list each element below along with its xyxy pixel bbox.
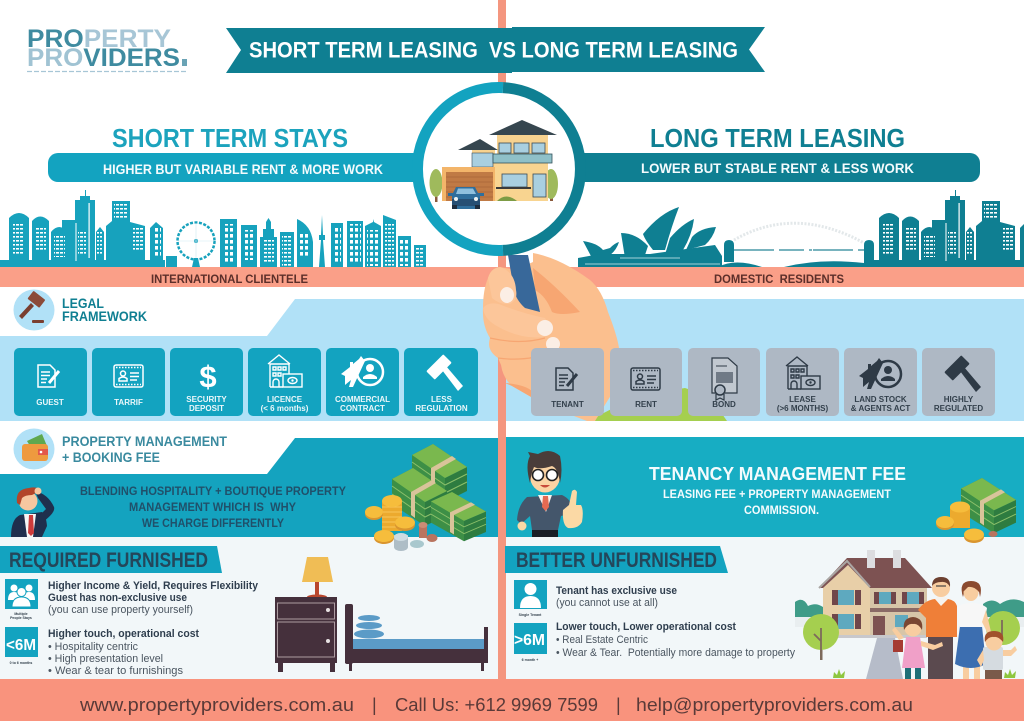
heading: property management and booking fee: PROPERTY MANAGEMENT	[62, 434, 228, 449]
heading: property management and booking fee	[62, 434, 228, 465]
tile: highly regulated: HIGHLY	[944, 395, 974, 404]
green hill	[590, 388, 727, 421]
tree right	[544, 169, 558, 201]
illustration: smiling man with thumbs up	[517, 451, 583, 537]
icon: under six months	[5, 627, 38, 665]
icon: over six months	[514, 623, 547, 662]
text: blending hospitality: BLENDING HOSPITALITY + BOUTIQUE PROPERTY	[80, 486, 346, 498]
tile: licence	[248, 348, 321, 416]
tile: licence: LICENCE	[267, 395, 303, 404]
small building	[166, 256, 177, 267]
harbour bridge	[718, 223, 874, 267]
text block: furnished benefits: • Hospitality centric	[48, 641, 138, 653]
tile: tenant	[531, 348, 604, 416]
boy	[977, 631, 1017, 679]
centre divider bar	[498, 0, 506, 680]
pill: long term subtitle	[580, 153, 980, 182]
icon: multiple people	[5, 579, 38, 620]
footer contact details: |	[372, 695, 377, 715]
panel: management fee right band	[505, 437, 1024, 537]
skyline: right city	[578, 190, 1024, 267]
text block: furnished benefits: Guest has non-exclusive use	[48, 592, 187, 604]
opera house	[578, 207, 722, 267]
mother	[955, 581, 991, 679]
footer band	[0, 679, 1024, 721]
tile: lease: LEASE	[789, 395, 816, 404]
heading: short term stays: SHORT TERM STAYS	[112, 125, 348, 153]
tile: lease	[766, 348, 839, 416]
panel: management fee left band	[0, 438, 505, 537]
tile: less regulation	[404, 348, 478, 416]
tile: security deposit: $	[199, 359, 217, 394]
text: blending hospitality: MANAGEMENT WHICH IS WHY	[129, 502, 296, 514]
bushes and fence	[795, 599, 1024, 627]
magnifier lens	[417, 87, 580, 250]
tile: less regulation: REGULATION	[415, 404, 468, 413]
text block: unfurnished benefits	[556, 585, 795, 659]
label: domestic residents: DOMESTIC RESIDENTS	[714, 274, 844, 286]
heading: legal framework: LEGAL	[62, 296, 104, 311]
icon: single tenant	[514, 580, 547, 617]
tile: land stock and agents act: & AGENTS ACT	[851, 404, 910, 413]
tile: highly regulated: REGULATED	[934, 404, 983, 413]
tree left	[430, 169, 442, 202]
illustration: cash and coins right	[936, 478, 1016, 543]
pill: short term subtitle	[48, 153, 420, 182]
label: international clientele: INTERNATIONAL CLIENTELE	[151, 274, 308, 286]
logo: PROPERTY	[27, 25, 171, 53]
text block: unfurnished benefits: • Wear & Tear. Potentially more damage to property	[556, 647, 795, 659]
footer contact details: |	[616, 695, 621, 715]
illustration: house with family	[795, 550, 1024, 679]
skyline: left city	[0, 190, 426, 267]
icon: under six months: 0 to 6 months	[10, 661, 32, 665]
tile: rent	[610, 348, 682, 416]
text block: unfurnished benefits: Lower touch, Lower operational cost	[556, 621, 736, 633]
text block: furnished benefits: • Wear & tear to furnishings	[48, 665, 184, 677]
tile: less regulation: LESS	[431, 395, 453, 404]
text block: furnished benefits	[48, 580, 259, 677]
footer contact details: Call Us: +612 9969 7599	[395, 695, 598, 715]
text block: furnished benefits: Higher touch, operational cost	[48, 628, 199, 640]
logo	[27, 25, 188, 72]
text: blending hospitality	[80, 486, 346, 530]
tile: licence: (< 6 months)	[261, 404, 309, 413]
tile: tenant: TENANT	[551, 400, 584, 409]
illustration: bedside table and lamp	[275, 557, 337, 672]
ferris wheel	[178, 222, 214, 267]
text: blending hospitality: WE CHARGE DIFFERENTLY	[142, 518, 284, 530]
tile: security deposit: SECURITY	[186, 395, 227, 404]
text block: furnished benefits: Higher Income & Yield, Requires Flexibility	[48, 580, 259, 592]
pill: short term subtitle: HIGHER BUT VARIABLE RENT & MORE WORK	[103, 162, 383, 177]
heading: legal framework: FRAMEWORK	[62, 309, 147, 324]
tile: guest: GUEST	[36, 398, 64, 407]
tile: highly regulated	[922, 348, 995, 416]
text: tenancy management fee: COMMISSION.	[744, 505, 819, 517]
text: tenancy management fee: TENANCY MANAGEMENT FEE	[649, 464, 906, 484]
text block: furnished benefits: (you can use property yourself)	[48, 604, 193, 616]
text block: unfurnished benefits: (you cannot use at all)	[556, 597, 658, 609]
footer contact details: www.propertyproviders.com.au	[79, 695, 354, 715]
text block: unfurnished benefits: Tenant has exclusive use	[556, 585, 677, 597]
heading: legal framework	[62, 296, 147, 324]
heading: long term leasing: LONG TERM LEASING	[650, 125, 905, 153]
handle	[508, 255, 540, 312]
icon: under six months: <6M	[6, 637, 36, 654]
tile: commercial contract: COMMERCIAL	[335, 395, 390, 404]
panel: bottom section background	[0, 537, 1024, 679]
salmon clientele band	[0, 267, 1024, 287]
tile: land stock and agents act: LAND STOCK	[854, 395, 907, 404]
icon: multiple people: Multiple	[14, 612, 28, 616]
car	[448, 187, 484, 209]
text: tenancy management fee: LEASING FEE + PROPERTY MANAGEMENT	[663, 489, 891, 501]
icon: single tenant: Single Tenant	[519, 613, 542, 617]
logo: PROVIDERS	[27, 44, 180, 72]
title ribbon: SHORT TERM LEASING VS LONG TERM LEASING	[249, 38, 738, 62]
tile: bond	[688, 348, 760, 416]
panel: legal framework background band	[0, 299, 1024, 421]
trees	[803, 611, 1020, 660]
tile: land stock and agents act	[844, 348, 917, 416]
coin stack	[365, 495, 438, 551]
tile: rent: RENT	[635, 400, 657, 409]
tile: commercial contract	[326, 348, 399, 416]
illustration: cash and coins left	[365, 444, 486, 551]
hand holding magnifier	[483, 253, 620, 421]
father	[918, 577, 957, 679]
house	[442, 120, 557, 201]
text: tenancy management fee	[649, 464, 906, 517]
tile: guest	[14, 348, 87, 416]
title ribbon	[226, 27, 765, 73]
footer contact details	[79, 695, 913, 715]
icon: over six months: 6 month +	[522, 658, 538, 662]
text block: unfurnished benefits: • Real Estate Centric	[556, 634, 648, 646]
icon: gavel in circle	[14, 290, 54, 330]
footer contact details: help@propertyproviders.com.au	[636, 695, 913, 715]
pill: long term subtitle: LOWER BUT STABLE RENT & LESS WORK	[641, 161, 914, 176]
heading: property management and booking fee: + BOOKING FEE	[62, 450, 160, 465]
tile: security deposit: DEPOSIT	[189, 404, 224, 413]
family house	[819, 550, 932, 679]
tile: bond: BOND	[712, 400, 736, 409]
text block: furnished benefits: • High presentation level	[48, 653, 163, 665]
grass tufts	[833, 669, 1016, 678]
tile: lease: (>6 MONTHS)	[777, 404, 828, 413]
tile: tarrif	[92, 348, 165, 416]
illustration: confused man	[11, 487, 54, 537]
tile: commercial contract: CONTRACT	[340, 404, 385, 413]
icon: over six months: >6M	[514, 632, 545, 649]
illustration: bed	[345, 604, 488, 671]
heading ribbon: better unfurnished: BETTER UNFURNISHED	[516, 549, 717, 572]
heading ribbon: required furnished: REQUIRED FURNISHED	[9, 549, 208, 572]
girl	[892, 617, 943, 679]
icon: wallet in circle	[14, 428, 54, 470]
tile: tarrif: TARRIF	[114, 398, 143, 407]
icon: multiple people: People Stays	[10, 616, 32, 620]
downtown towers	[220, 215, 426, 267]
tile: security deposit	[170, 348, 243, 416]
